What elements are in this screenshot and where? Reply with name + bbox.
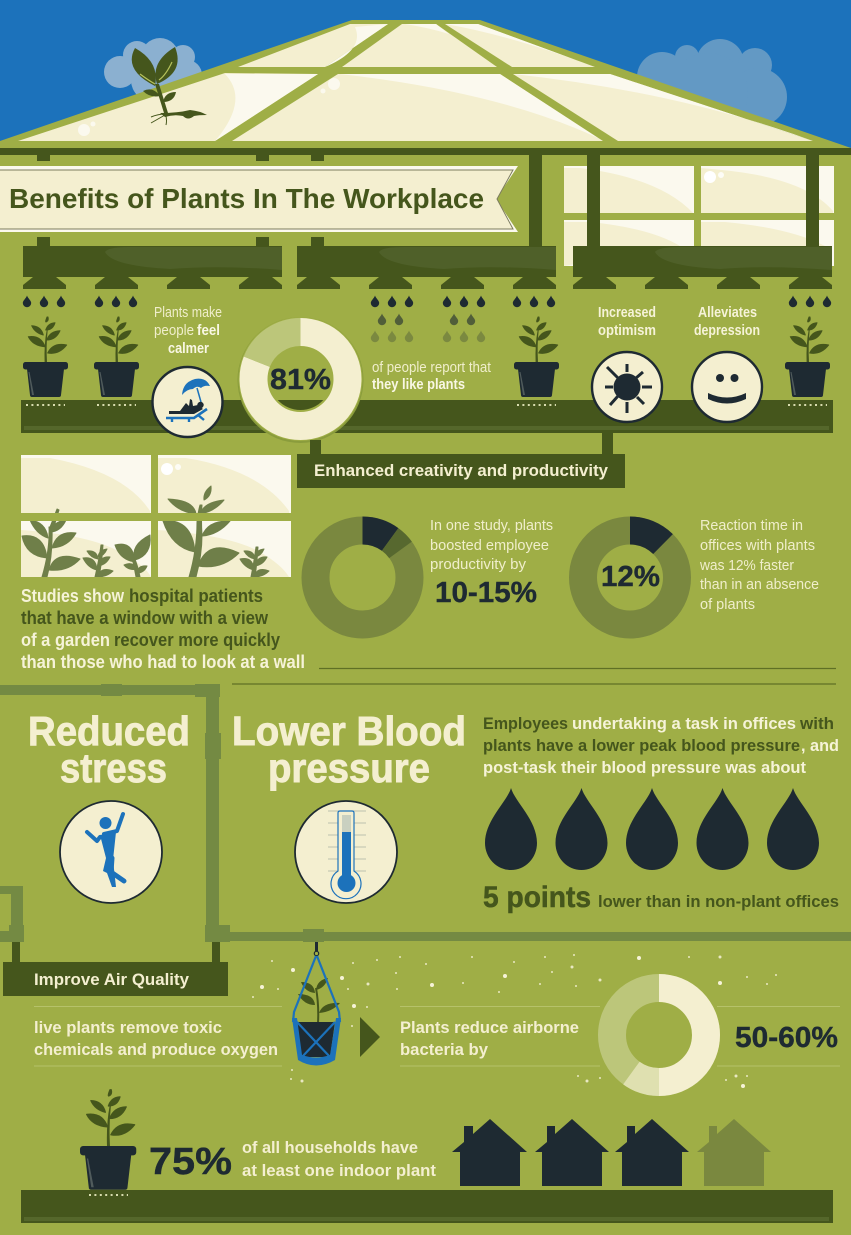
- text: plants reduce airborne bacteria: Plants reduce airborne: [400, 1018, 579, 1037]
- shelf: upper: [21, 400, 833, 433]
- heading: lower blood pressure: pressure: [268, 745, 430, 791]
- heading box: improve air quality: Improve Air Quality: [34, 970, 190, 989]
- heading: lower blood pressure: Lower Blood: [232, 708, 466, 754]
- text: hospital patients study: that have a window with a view: [21, 608, 269, 628]
- text: alleviates depression: [694, 305, 760, 339]
- pictogram: houses: [452, 1119, 771, 1186]
- plant pot: lower: [80, 1090, 136, 1190]
- value: 12%: [601, 561, 660, 593]
- text: plants make people feel calmer: feel: [197, 323, 220, 339]
- text: productivity study: boosted employee: [430, 538, 549, 554]
- heading box: enhanced creativity and productivity: Enhanced creativity and productivity: [314, 461, 609, 480]
- chart: 81% donut: [238, 317, 364, 443]
- text: people report they like plants: they like plants: [372, 377, 465, 393]
- shelf: lower: [21, 1190, 833, 1223]
- pipes: [0, 684, 851, 942]
- icon: smiley face: [692, 352, 762, 422]
- roof panes: [18, 24, 813, 141]
- text: blood pressure study: [483, 714, 839, 777]
- text: 5 points lower: [483, 881, 839, 914]
- text: reaction time: of plants: [700, 597, 755, 613]
- icon: person relaxing on a lounger: [152, 367, 222, 437]
- value: 50-60%: 50-60%: [735, 1022, 838, 1054]
- planters row: [23, 246, 832, 289]
- beam stubs and columns: [37, 155, 542, 247]
- text: reaction time: Reaction time in: [700, 518, 803, 534]
- text: plants reduce airborne bacteria: bacteria by: [400, 1040, 489, 1059]
- text: plants make people feel calmer: Plants make: [154, 305, 222, 321]
- text: reaction time: was 12% faster: [699, 558, 794, 574]
- value: 75%: 75%: [149, 1141, 232, 1183]
- text: hospital patients study: hospital patients: [129, 586, 263, 606]
- text: productivity study: [430, 518, 553, 609]
- garden window: [21, 455, 291, 577]
- text: live plants remove toxic chemicals: [34, 1018, 278, 1059]
- text: hospital patients study: of a garden: [21, 630, 110, 650]
- heading: reduced stress: Reduced: [28, 708, 190, 754]
- text: households with a plant: at least one indoor plant: [242, 1161, 436, 1180]
- text: increased optimism: Increased: [598, 305, 656, 321]
- chart: 10-15% donut: [316, 530, 410, 624]
- garden plants: [22, 486, 269, 577]
- chart: 50-60% donut: [612, 988, 706, 1082]
- greenhouse roof: [0, 20, 851, 148]
- text: productivity study: productivity by: [430, 557, 527, 573]
- text: productivity study: In one study, plants: [430, 518, 553, 534]
- chart: 12% donut: [583, 530, 677, 624]
- text: alleviates depression: depression: [694, 323, 760, 339]
- text: alleviates depression: Alleviates: [698, 305, 757, 321]
- value: 10-15%: [435, 577, 537, 609]
- roof highlights: [78, 24, 813, 141]
- sparkle dots: air particles: [252, 954, 777, 1088]
- text: 5 points lower: lower than in non-plant offices: [598, 892, 839, 911]
- text: hospital patients study: Studies show: [21, 586, 125, 606]
- text: hospital patients study: than those who had to look at a wall: [21, 652, 305, 672]
- text: blood pressure study: with: [799, 714, 834, 733]
- text: live plants remove toxic chemicals: chemicals and produce oxygen: [34, 1040, 278, 1059]
- text: people report they like plants: [372, 360, 491, 393]
- text: live plants remove toxic chemicals: live plants remove toxic: [34, 1018, 222, 1037]
- text: reaction time: than in an absence: [700, 577, 819, 593]
- icon: hanging plant: [292, 942, 341, 1066]
- text: plants make people feel calmer: calmer: [168, 341, 209, 357]
- text: blood pressure study: undertaking a task in offices: [572, 714, 796, 733]
- heading: lower blood pressure: [232, 708, 466, 791]
- text: blood pressure study: , and: [801, 736, 839, 755]
- beam: [0, 148, 851, 155]
- text: hospital patients study: [21, 586, 305, 672]
- sky: [0, 0, 851, 148]
- pictogram: five blood drops: [485, 788, 819, 870]
- text: plants make people feel calmer: people: [154, 323, 194, 339]
- text: plants make people feel calmer: [154, 305, 222, 357]
- cloud: right: [637, 39, 787, 133]
- water drops: [23, 296, 831, 342]
- text: increased optimism: optimism: [598, 323, 656, 339]
- text: people report they like plants: of people report that: [372, 360, 491, 376]
- icon: thermometer: [295, 801, 397, 903]
- plant pots: upper row: [23, 317, 830, 397]
- text: reaction time: [699, 518, 819, 613]
- text: increased optimism: [598, 305, 656, 339]
- text: blood pressure study: Employees: [483, 714, 568, 733]
- heading: reduced stress: [28, 708, 190, 791]
- title: Benefits of Plants In The Workplace: [9, 183, 484, 214]
- text: households with a plant: of all households have: [242, 1138, 418, 1157]
- icon: sun: [592, 352, 662, 422]
- icon: sprout on roof: [132, 47, 207, 125]
- text: blood pressure study: post-task their blood pressure was about: [483, 758, 806, 777]
- text: blood pressure study: plants have a lower peak blood pressure: [483, 736, 800, 755]
- icon: relaxed stick figure: [60, 801, 162, 903]
- heading box: enhanced creativity and productivity: [297, 433, 625, 488]
- heading box: improve air quality: [3, 942, 228, 996]
- cloud: left: [104, 38, 202, 102]
- arrow: [360, 1017, 380, 1057]
- value: 81%: [270, 364, 331, 396]
- text: hospital patients study: recover more quickly: [114, 630, 280, 650]
- text: 5 points lower: 5 points: [483, 881, 591, 914]
- text: households with a plant: [242, 1138, 436, 1180]
- text: reaction time: offices with plants: [700, 538, 815, 554]
- heading: reduced stress: stress: [60, 745, 167, 791]
- title banner: [0, 166, 518, 232]
- text: plants reduce airborne bacteria: [400, 1018, 579, 1059]
- windows: upper right: [564, 155, 834, 266]
